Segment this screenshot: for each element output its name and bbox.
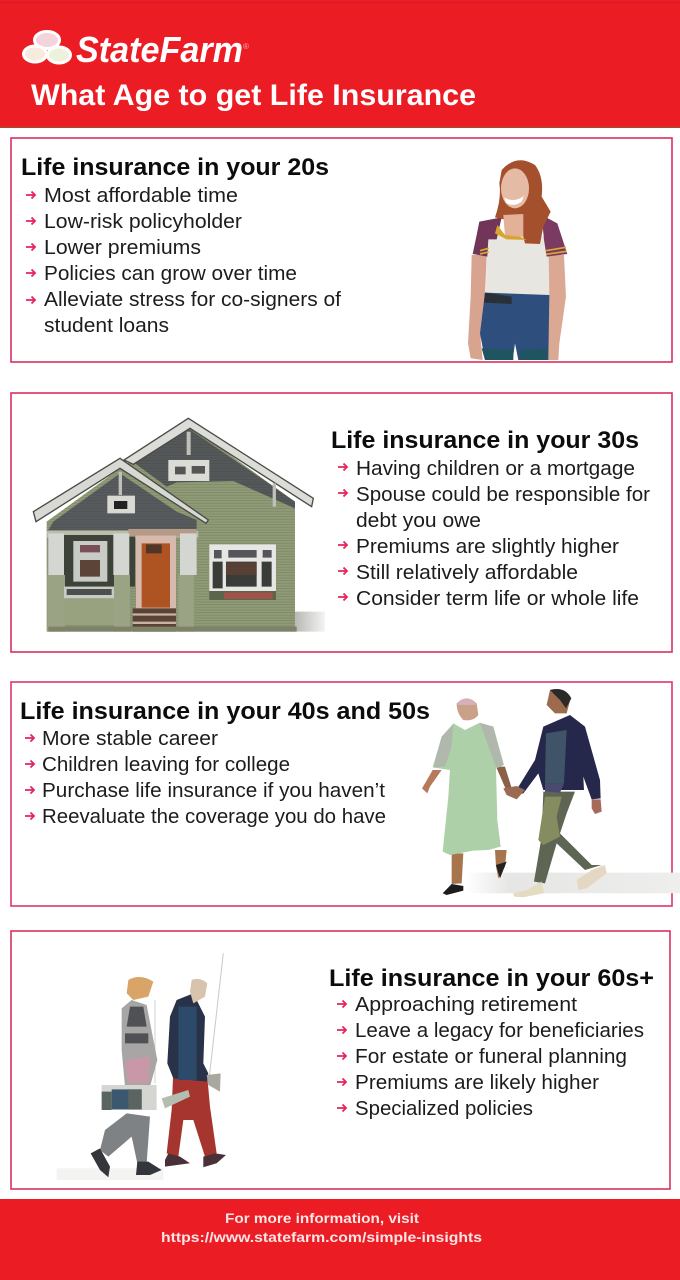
list: 30s bullets: debt you owe [356,510,481,532]
heading: 20s: Life insurance in your 20s [21,154,329,181]
panel: life insurance in your 20s [11,138,672,362]
list: 20s bullets: Most affordable time [44,185,238,207]
heading: 40s and 50s: Life insurance in your 40s and 50s [20,698,430,725]
header banner [0,0,680,128]
list: 60s+ bullets: Approaching retirement [355,994,577,1016]
list: 20s bullets: Lower premiums [44,237,201,259]
list: 60s+ bullets: Premiums are likely higher [355,1072,599,1094]
photo: couple walking hand in hand [422,689,680,897]
list: 40s and 50s bullets [25,728,386,828]
list: 30s bullets: Spouse could be responsible for [356,484,650,506]
footer text: url: https://www.statefarm.com/simple-insights [161,1229,482,1245]
list: 60s+ bullets [337,994,644,1120]
heading: 60s+: Life insurance in your 60s+ [329,965,654,992]
list: 20s bullets [26,185,341,337]
list: 30s bullets: Having children or a mortgage [356,458,635,480]
registered mark: ® [243,42,249,51]
list: 20s bullets: Policies can grow over time [44,263,297,285]
list: 20s bullets: Low-risk policyholder [44,211,242,233]
list: 40s and 50s bullets: Children leaving for college [42,754,290,776]
list: 40s and 50s bullets: More stable career [42,728,218,750]
panel: life insurance in your 30s [11,393,672,652]
photo: older couple going fishing [57,953,226,1180]
panel: life insurance in your 40s and 50s [11,682,680,906]
list: 30s bullets [338,458,650,610]
icon: State Farm three ovals logo [24,32,70,63]
heading: 30s: Life insurance in your 30s [331,427,639,454]
list: 60s+ bullets: Leave a legacy for beneficiaries [355,1020,644,1042]
photo: young woman [468,160,567,360]
list: 40s and 50s bullets: Reevaluate the coverage you do have [42,806,386,828]
list: 20s bullets: Alleviate stress for co-signers of [44,289,341,311]
list: 30s bullets: Premiums are slightly higher [356,536,619,558]
list: 20s bullets: student loans [44,315,169,337]
photo: craftsman house [33,418,325,632]
list: 40s and 50s bullets: Purchase life insurance if you haven’t [42,780,385,802]
list: 30s bullets: Consider term life or whole life [356,588,639,610]
list: 60s+ bullets: For estate or funeral planning [355,1046,627,1068]
list: 30s bullets: Still relatively affordable [356,562,578,584]
footer banner [0,1199,680,1280]
panel: life insurance in your 60s+ [11,931,670,1189]
list: 60s+ bullets: Specialized policies [355,1098,533,1120]
title: What Age to get Life Insurance [31,79,476,112]
logo wordmark: StateFarm [76,29,243,70]
footer text: call to visit: For more information, visit [225,1210,419,1226]
